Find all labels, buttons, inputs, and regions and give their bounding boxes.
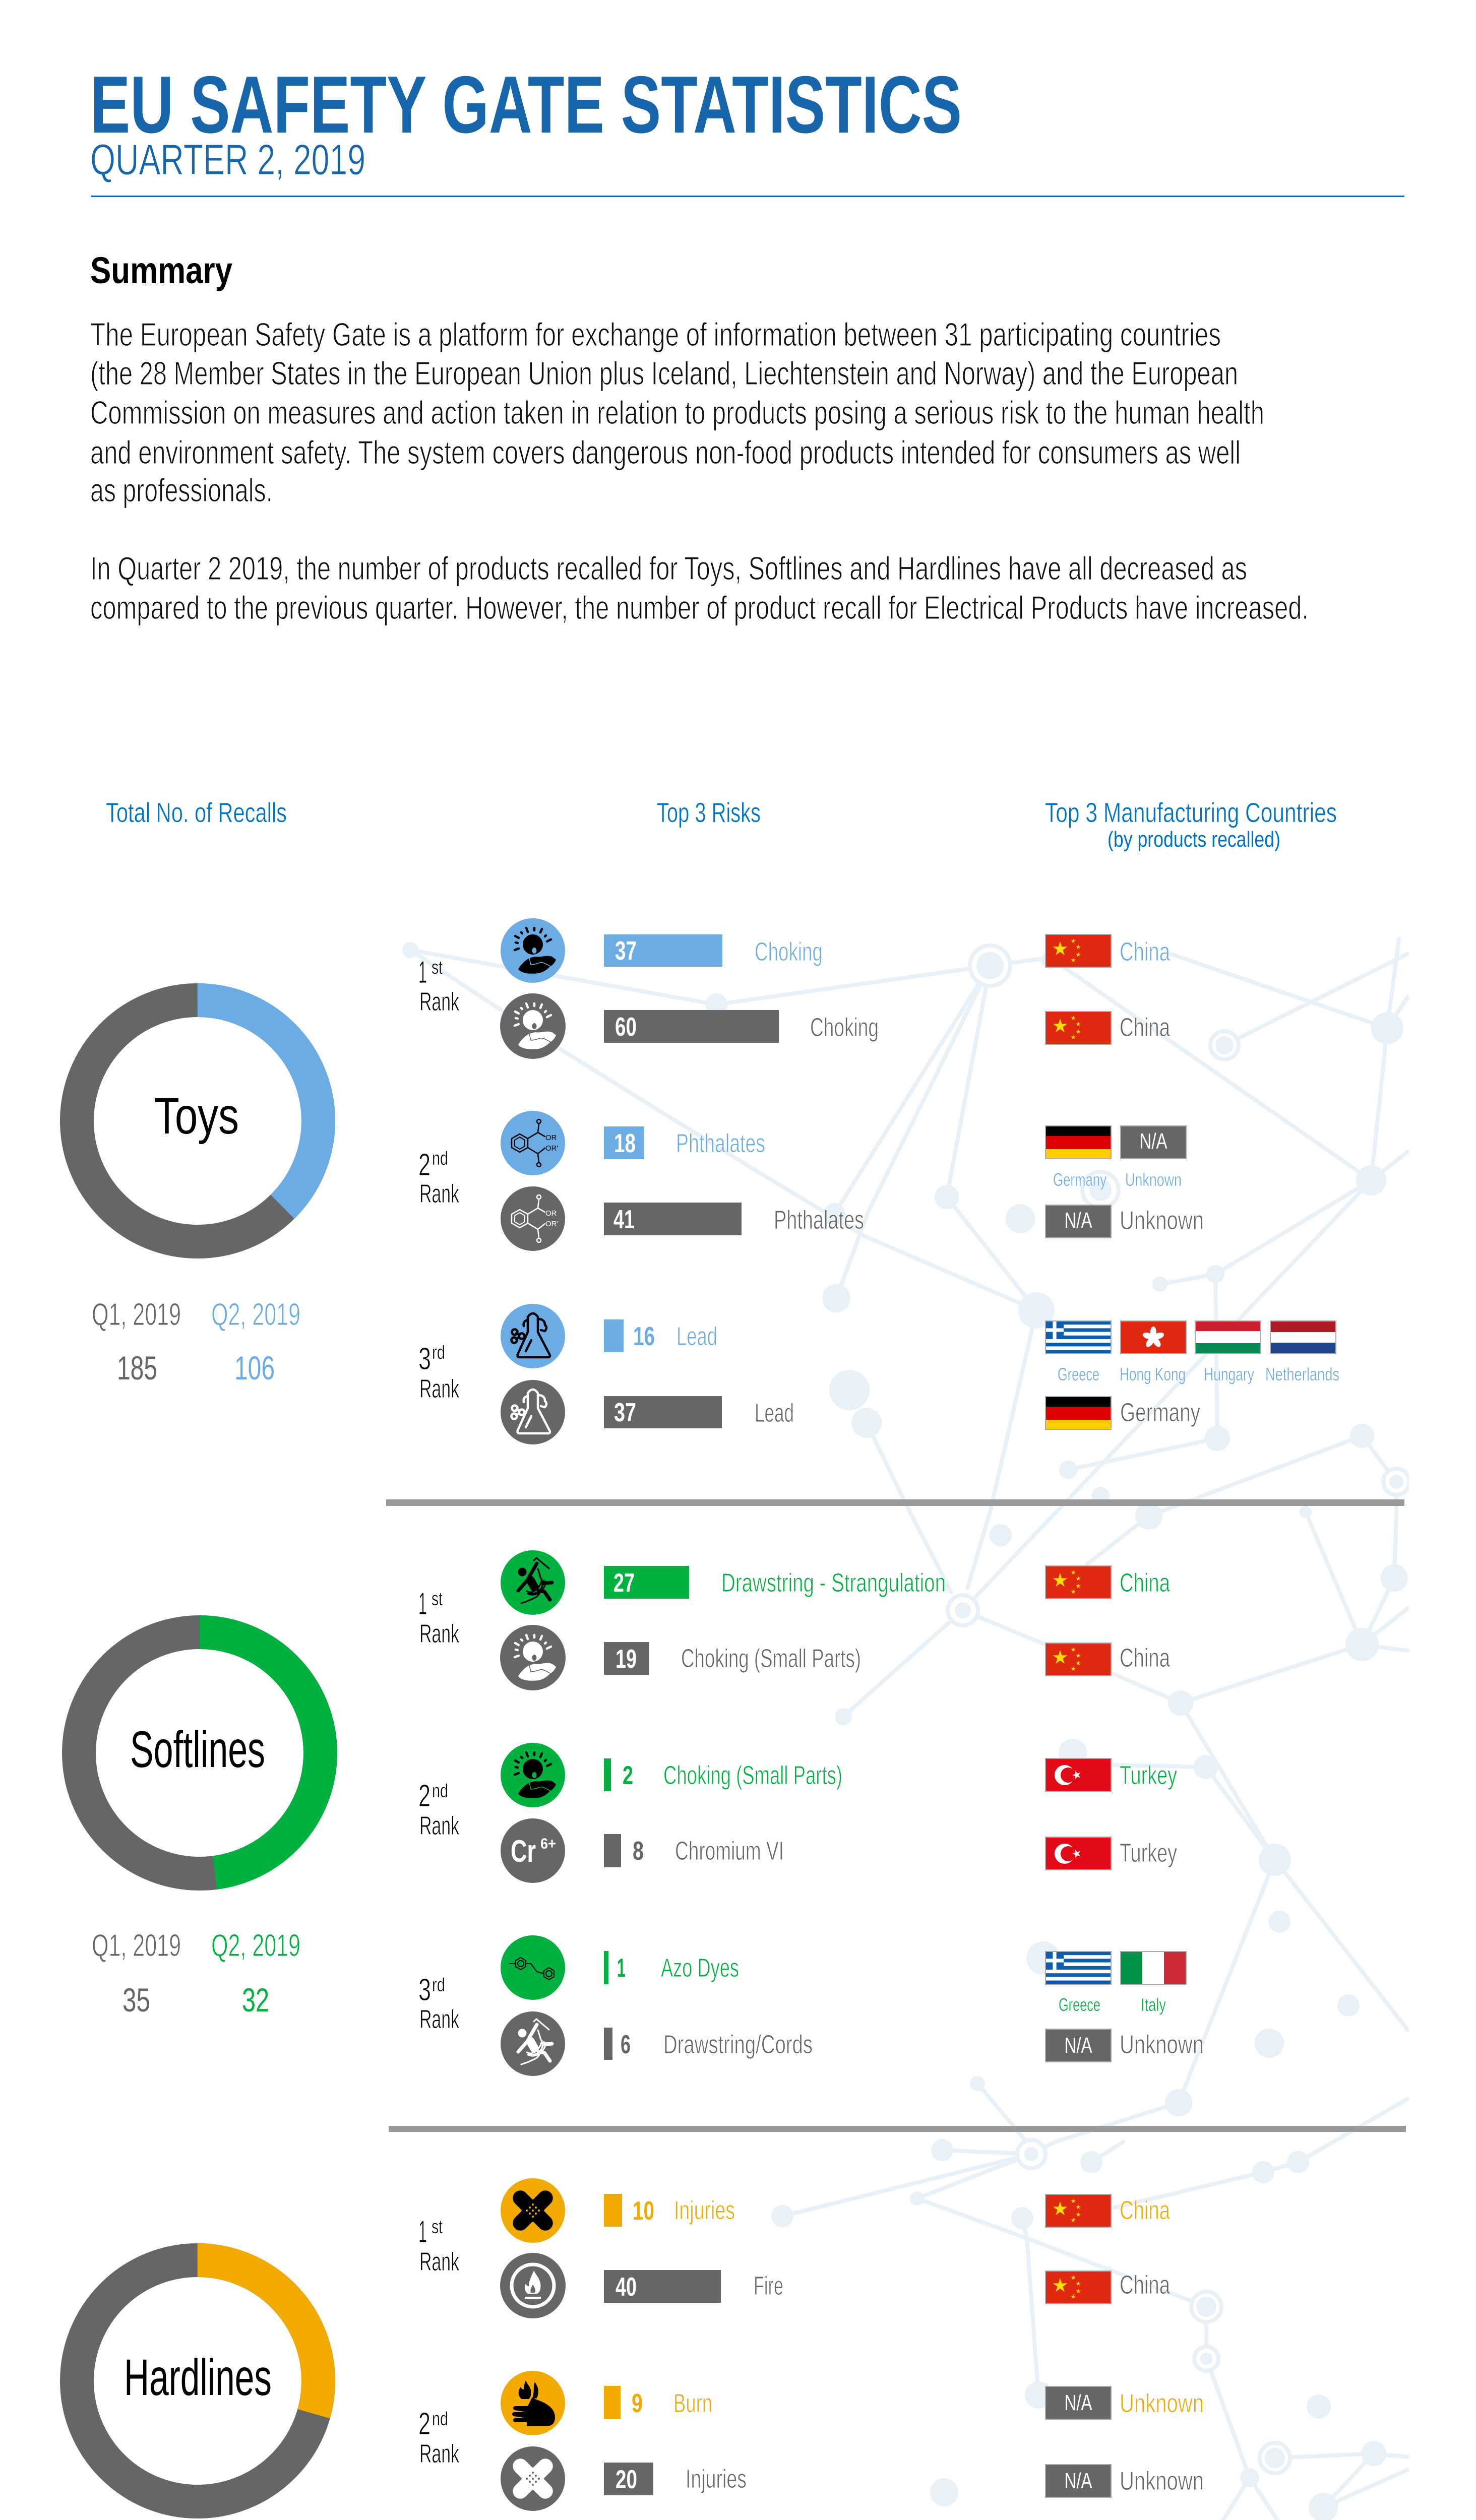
rank labels: Toys: nd [432, 1148, 448, 1169]
bar: rank 3 Q2: 1 [617, 1954, 626, 1983]
bar: rank 3 Q1: 37 [614, 1398, 636, 1427]
country: Unknown [1046, 2029, 1204, 2062]
country: Unknown: Unknown [1120, 2389, 1204, 2418]
quarter comparison: Toys: 106 [234, 1349, 275, 1387]
country: Turkey: Turkey [1120, 1839, 1177, 1868]
country: Unknown: Unknown [1120, 2030, 1204, 2059]
countries: Germany and Unknown [1046, 1126, 1186, 1190]
rank labels: Softlines: st [432, 1589, 443, 1610]
summary heading: Summary [90, 249, 232, 291]
rank labels: Toys: st [432, 957, 443, 978]
label: Phthalates: Phthalates [676, 1129, 765, 1158]
rank labels: Softlines: rd [432, 1975, 445, 1996]
rank labels: Toys: Rank [419, 1179, 460, 1209]
label: Chromium VI: Chromium VI [675, 1837, 784, 1866]
bar: rank 1 Q1 [604, 1010, 779, 1043]
bar: rank 2 Q1: 20 [616, 2465, 637, 2494]
country: China: China [1120, 1568, 1170, 1598]
icon: phthalates Q1: OR' [545, 1220, 559, 1228]
label: Injuries: Injuries [686, 2465, 747, 2494]
icon: chromium Q1 [501, 1818, 565, 1883]
country: China: China [1120, 2271, 1170, 2300]
icon: choking Q2 [501, 1743, 565, 1807]
bar: rank 1 Q1 [604, 1642, 649, 1675]
country: Unknown: Unknown [1120, 1206, 1204, 1235]
country: Unknown: N/A [1065, 2033, 1092, 2058]
countries: Greece and Italy: Greece [1059, 1994, 1100, 2015]
label: Drawstring/Cords: Drawstring/Cords [663, 2030, 813, 2059]
quarter comparison: Toys: 185 [117, 1349, 157, 1387]
icon: azo dyes Q2 [501, 1935, 565, 2000]
label: Choking (Small Parts): Choking (Small Parts) [663, 1761, 842, 1790]
country: China: China [1120, 1013, 1170, 1042]
quarter comparison: Toys: Q2, 2019 [211, 1297, 300, 1332]
rank labels: Hardlines: nd [432, 2409, 448, 2430]
bar: rank 1 Q1: 40 [616, 2273, 637, 2302]
country: China [1046, 1012, 1170, 1044]
country: China [1046, 2271, 1170, 2304]
label: Choking: Choking [755, 937, 823, 967]
rank labels: Toys: 3 [418, 1342, 431, 1376]
rank labels: Softlines: Rank [419, 1811, 460, 1841]
rank labels: Softlines: 2 [418, 1779, 430, 1813]
bar: rank 3 Q2: 16 [633, 1322, 655, 1351]
rank labels: Hardlines: 2 [418, 2407, 430, 2441]
summary paragraph 1 [90, 316, 1264, 509]
countries: Greece, Hong Kong, Hungary, Netherlands [1046, 1321, 1339, 1384]
header: total recalls: Total No. of Recalls [106, 797, 287, 828]
icon: burn Q2 [501, 2371, 565, 2435]
country: Unknown [1046, 1205, 1204, 1238]
country: China [1046, 2194, 1170, 2227]
bar: rank 2 Q1 [604, 1834, 644, 1867]
countries: Greece and Italy: Italy [1141, 1994, 1166, 2015]
bar: rank 3 Q1: 6 [621, 2030, 631, 2059]
country: China [1046, 934, 1170, 967]
title: EU SAFETY GATE STATISTICS [90, 59, 962, 150]
countries: Greece and Italy [1046, 1951, 1186, 2015]
bar: rank 2 Q1: 8 [633, 1837, 644, 1866]
summary [90, 249, 1309, 626]
donut chart: Softlines: Softlines [130, 1721, 265, 1778]
rank labels: Hardlines: Rank [419, 2439, 460, 2469]
label: Lead: Lead [755, 1399, 794, 1428]
icon: phthalates Q1: OR [545, 1209, 557, 1218]
quarter comparison: Toys: Q1, 2019 [92, 1297, 181, 1332]
icon: phthalates Q2: OR' [545, 1144, 559, 1153]
panel: Toys [77, 918, 1339, 1444]
subtitle: QUARTER 2, 2019 [90, 136, 365, 184]
country: Unknown: Unknown [1120, 2467, 1204, 2496]
quarter comparison: Softlines: Q1, 2019 [92, 1928, 181, 1963]
country: Turkey [1046, 1837, 1177, 1870]
countries: Greece, Hong Kong, Hungary, Netherlands: Netherlands [1265, 1364, 1339, 1384]
donut chart: Hardlines: Hardlines [124, 2349, 272, 2406]
countries: Greece, Hong Kong, Hungary, Netherlands: Hong Kong [1120, 1364, 1186, 1384]
quarter comparison: Softlines [92, 1928, 300, 2019]
rank labels: Softlines: Rank [419, 2005, 460, 2034]
background: molecular network pattern [402, 939, 1413, 2520]
icon: phthalates Q1 [501, 1186, 565, 1251]
bar: rank 2 Q1 [604, 2463, 653, 2495]
label: Lead: Lead [676, 1322, 717, 1351]
summary paragraph 2 [90, 550, 1309, 626]
rank labels: Toys: rd [432, 1342, 445, 1363]
label: Injuries: Injuries [674, 2196, 735, 2225]
country: Turkey [1046, 1758, 1177, 1791]
icon: injuries Q1 [501, 2446, 565, 2511]
panel: Softlines [79, 1550, 1204, 2076]
bar: rank 2 Q1: 41 [613, 1205, 635, 1234]
label: Choking: Choking [810, 1013, 879, 1042]
countries: Greece, Hong Kong, Hungary, Netherlands: Hungary [1204, 1364, 1254, 1384]
bar: rank 1 Q1: 60 [615, 1013, 637, 1042]
rank labels: Toys: Rank [419, 987, 460, 1017]
country: China [1046, 1566, 1170, 1599]
title block [90, 59, 1404, 197]
panel: Hardlines [77, 2178, 1231, 2520]
icon: drawstring Q1 [501, 2011, 565, 2076]
label: Azo Dyes: Azo Dyes [661, 1954, 739, 1983]
bar: rank 2 Q2 [604, 2386, 643, 2419]
country: Unknown: N/A [1065, 1208, 1092, 1233]
countries: Germany and Unknown: Unknown [1125, 1169, 1182, 1190]
bar: rank 1 Q2 [604, 934, 722, 967]
donut chart: Hardlines [77, 2260, 319, 2502]
bar: rank 3 Q1 [604, 2028, 631, 2060]
rank labels: Softlines: nd [432, 1781, 448, 1802]
countries: Germany and Unknown: Germany [1053, 1169, 1106, 1190]
bar: rank 1 Q1: 19 [616, 1645, 637, 1674]
bar: rank 2 Q2: 18 [614, 1129, 636, 1158]
header: top 3 manufacturing countries: Top 3 Manufacturing Countries [1045, 797, 1337, 828]
rank labels: Softlines: 3 [418, 1973, 431, 2007]
rank labels: Toys: Rank [419, 1374, 460, 1404]
countries: Germany and Unknown: N/A [1139, 1129, 1167, 1154]
quarter comparison: Softlines: Q2, 2019 [211, 1928, 300, 1963]
country: China: China [1120, 1644, 1170, 1673]
quarter comparison: Softlines: 32 [242, 1981, 269, 2019]
bar: rank 2 Q2: 9 [632, 2389, 643, 2418]
header: top 3 manufacturing countries [1045, 797, 1337, 852]
donut chart: Toys: Toys [154, 1087, 239, 1145]
icon: phthalates Q2 [501, 1111, 565, 1175]
bar: rank 1 Q2: 37 [615, 936, 637, 966]
icon: choking Q1 [500, 1625, 566, 1690]
country: Unknown: N/A [1065, 2469, 1092, 2493]
country: China: China [1120, 2196, 1170, 2225]
bar: rank 3 Q1 [604, 1396, 722, 1428]
icon: phthalates Q2: OR [545, 1133, 557, 1142]
label: Choking (Small Parts): Choking (Small Parts) [681, 1644, 861, 1673]
country: Unknown: N/A [1065, 2390, 1092, 2415]
rank labels: Hardlines [418, 2215, 460, 2520]
rank labels: Softlines: 1 [418, 1587, 427, 1621]
donut chart: Toys [77, 1000, 319, 1242]
icon: drawstring Q2 [501, 1550, 565, 1615]
donut chart: Softlines [79, 1632, 321, 1874]
header: top 3 manufacturing countries: (by products recalled) [1108, 827, 1280, 852]
bar: rank 1 Q2 [604, 1566, 689, 1599]
title rule [91, 196, 1404, 197]
icon: fire Q1 [500, 2253, 566, 2318]
label: Burn: Burn [673, 2389, 712, 2418]
column headers [106, 797, 1337, 852]
country: China: China [1120, 937, 1170, 967]
country: Unknown [1046, 2465, 1204, 2497]
country: China [1046, 1643, 1170, 1676]
bar: rank 3 Q2 [604, 1951, 626, 1984]
icon: injuries Q2 [501, 2178, 565, 2243]
rank labels: Toys [418, 955, 460, 1404]
label: Drawstring - Strangulation: Drawstring - Strangulation [721, 1568, 946, 1598]
icon: chromium Q1: Cr [511, 1834, 536, 1869]
quarter comparison: Softlines: 35 [122, 1981, 150, 2019]
summary paragraph 1: as professionals. [90, 472, 273, 509]
bar: rank 1 Q1 [604, 2270, 721, 2303]
label: Phthalates: Phthalates [774, 1206, 864, 1235]
rank labels: Softlines: Rank [419, 1619, 460, 1649]
rank labels: Hardlines: Rank [419, 2247, 460, 2277]
quarter comparison: Toys [92, 1297, 300, 1387]
bar: rank 2 Q2: 2 [623, 1761, 633, 1790]
rank labels: Hardlines: 1 [418, 2215, 427, 2249]
label: Fire: Fire [754, 2272, 783, 2301]
rank labels: Toys: 1 [418, 955, 427, 990]
rank labels: Toys: 2 [418, 1148, 430, 1182]
icon: lead Q2 [501, 1304, 565, 1368]
bar: rank 1 Q2: 10 [633, 2196, 654, 2226]
country: Germany: Germany [1120, 1398, 1200, 1427]
bar: rank 3 Q2 [604, 1319, 655, 1352]
countries: Greece, Hong Kong, Hungary, Netherlands: Greece [1058, 1364, 1099, 1384]
rank labels: Softlines [418, 1587, 460, 2034]
country: Germany [1046, 1397, 1200, 1429]
bar: rank 1 Q2 [604, 2194, 654, 2227]
header: top 3 risks: Top 3 Risks [657, 797, 761, 828]
bar: rank 2 Q1 [604, 1203, 742, 1235]
bar: rank 2 Q2 [604, 1758, 633, 1791]
icon: lead Q1 [501, 1380, 565, 1444]
country: Unknown [1046, 2386, 1204, 2419]
icon: choking Q1 [500, 993, 566, 1059]
bar: rank 2 Q2 [604, 1126, 644, 1159]
icon: chromium Q1: 6+ [540, 1836, 556, 1852]
bar: rank 1 Q2: 27 [613, 1568, 635, 1598]
icon: choking Q2 [501, 918, 565, 983]
rank labels: Hardlines: st [432, 2217, 443, 2238]
country: Turkey: Turkey [1120, 1761, 1177, 1790]
